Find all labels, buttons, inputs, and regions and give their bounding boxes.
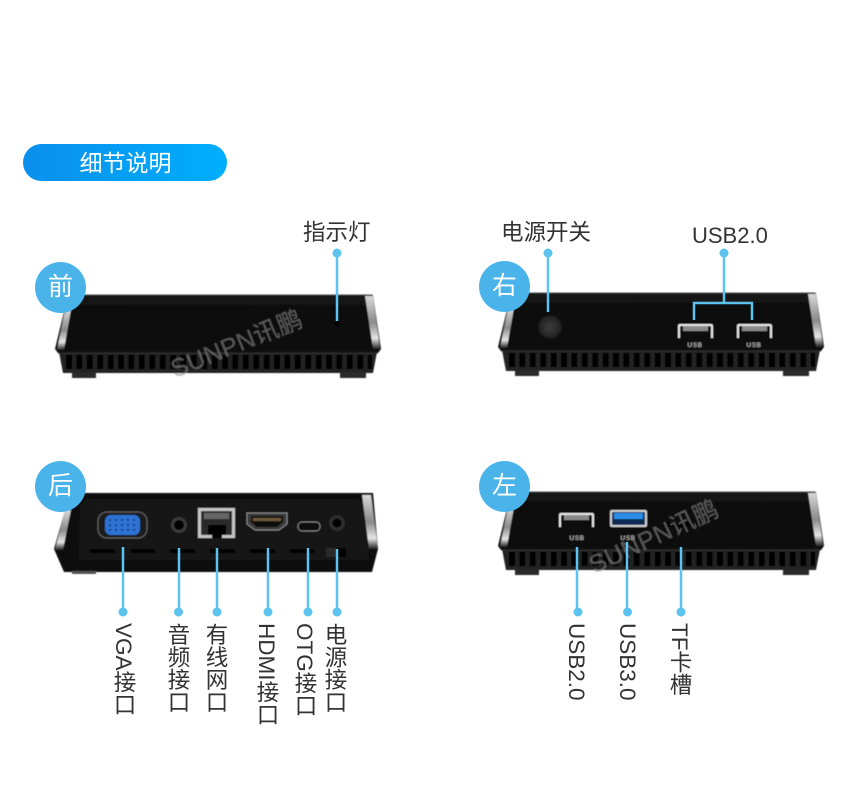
badge: right bbox=[479, 261, 530, 312]
label: power switch: 电源开关 bbox=[501, 220, 591, 245]
device: back view bbox=[54, 493, 378, 574]
badge: back: 后 bbox=[48, 472, 73, 500]
USB silkscreen bbox=[569, 535, 636, 542]
HDMI port bbox=[247, 513, 287, 530]
label: HDMI: HDMI接口 bbox=[254, 623, 279, 726]
RJ45 port bbox=[198, 508, 235, 538]
badge: front bbox=[35, 262, 86, 313]
badge: left: 左 bbox=[492, 472, 517, 500]
leader lines bbox=[118, 248, 752, 616]
label: indicator light: 指示灯 bbox=[303, 220, 371, 245]
label: USB2.0 left: USB2.0 bbox=[564, 623, 589, 701]
badge: left bbox=[479, 461, 530, 512]
audio jack bbox=[171, 517, 187, 533]
watermark: SUNPN讯鹏 bbox=[167, 305, 307, 384]
heading pill: 细节说明 bbox=[80, 150, 172, 176]
USB 2.0 port bbox=[559, 513, 594, 527]
USB ports bbox=[678, 324, 772, 349]
badge: front: 前 bbox=[48, 273, 73, 301]
badge: back bbox=[35, 461, 86, 512]
label: TF slot: TF卡槽 bbox=[667, 623, 692, 696]
power button bbox=[537, 314, 563, 340]
USB ports: USB bbox=[746, 342, 762, 349]
micro USB port bbox=[298, 522, 320, 531]
VGA port bbox=[98, 512, 147, 538]
device: left view bbox=[498, 492, 824, 579]
silkscreen slots bbox=[90, 548, 346, 557]
label: OTG: OTG接口 bbox=[292, 623, 317, 717]
indicator hole bbox=[334, 321, 340, 326]
USB ports: USB bbox=[687, 342, 703, 349]
USB silkscreen: USB bbox=[569, 535, 585, 542]
label: VGA: VGA接口 bbox=[111, 623, 136, 716]
USB silkscreen: USB bbox=[620, 535, 636, 542]
DC jack bbox=[329, 515, 345, 531]
label: USB3.0: USB3.0 bbox=[615, 623, 640, 701]
badge: right: 右 bbox=[492, 272, 517, 300]
label: ethernet: 有线网口 bbox=[203, 623, 228, 713]
label: audio: 音频接口 bbox=[165, 623, 190, 713]
device: right view bbox=[498, 293, 824, 376]
device: front view bbox=[55, 295, 381, 384]
label: power port: 电源接口 bbox=[322, 623, 347, 713]
TF slot bbox=[667, 522, 691, 527]
USB 3.0 port bbox=[610, 510, 647, 527]
heading pill bbox=[23, 144, 227, 181]
label: USB2.0 right: USB2.0 bbox=[692, 223, 768, 248]
watermark: SUNPN讯鹏 bbox=[585, 495, 723, 579]
